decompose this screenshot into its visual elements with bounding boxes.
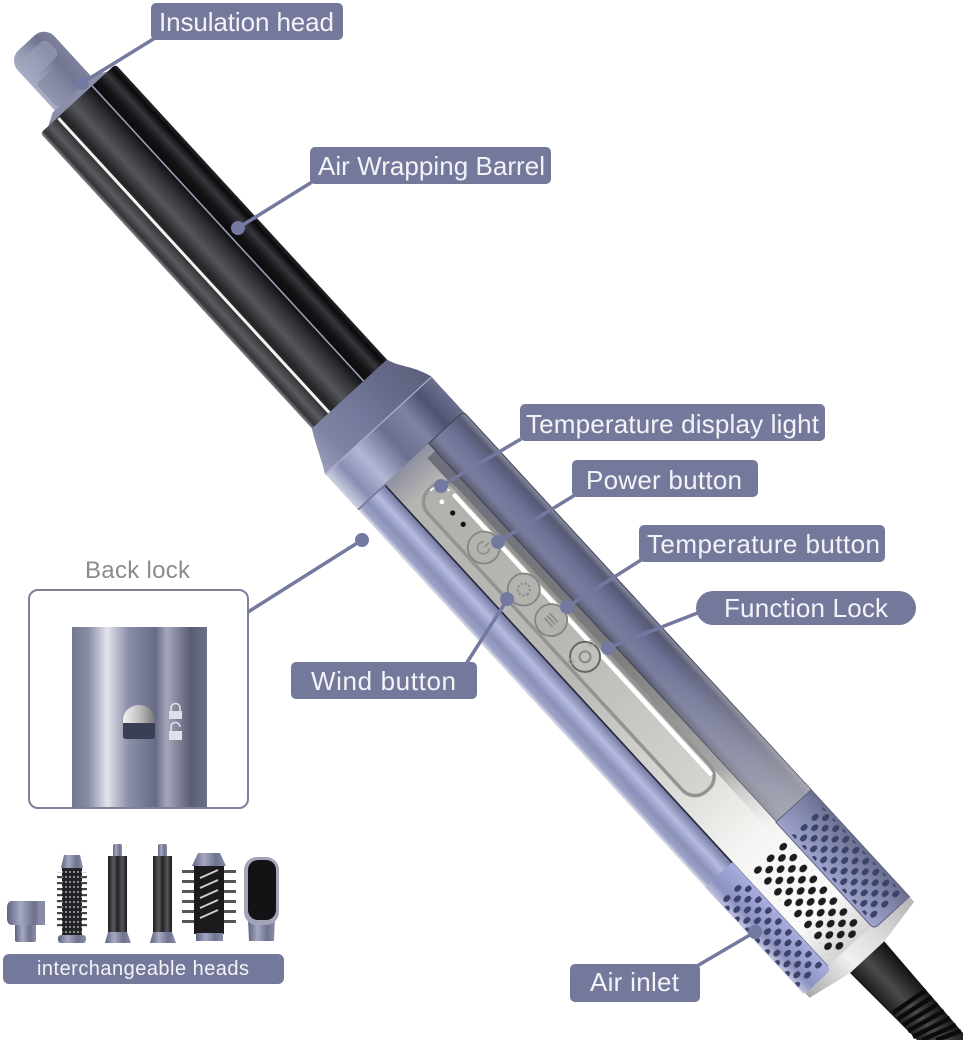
lower body panel [358, 485, 830, 993]
collar [296, 345, 434, 477]
temperature indicator dots [429, 481, 474, 528]
panel: back lock inset [29, 590, 248, 808]
end rim [802, 894, 920, 1004]
callout leader lines [82, 38, 755, 966]
silver control panel [384, 443, 886, 981]
head: large brush [182, 853, 236, 941]
interchangeable heads set [7, 844, 279, 943]
label: Power button [572, 460, 758, 497]
head: concentrator [7, 901, 45, 942]
callout dots [75, 76, 762, 939]
label: Temperature display light: Temperature display light [526, 409, 820, 439]
function lock button [563, 635, 607, 679]
label: Function Lock [696, 591, 916, 625]
insulation head tip [0, 14, 115, 134]
label: Insulation head: Insulation head [159, 7, 334, 37]
wind button [501, 567, 546, 612]
power button [461, 525, 506, 570]
cylinder [72, 627, 207, 807]
head: barrel two [150, 844, 176, 943]
head: paddle brush [244, 857, 279, 941]
label: Wind button [291, 662, 477, 699]
vented end: lower [705, 862, 831, 995]
upper body panel [429, 411, 811, 822]
power cable [850, 941, 963, 1040]
label: Function Lock: Function Lock [724, 593, 889, 623]
silver end vents [752, 841, 864, 957]
label: Wind button: Wind button [311, 666, 456, 696]
label: interchangeable heads [3, 954, 284, 984]
air wrapping barrel [40, 64, 390, 431]
label: Air inlet: Air inlet [590, 967, 680, 997]
label: Temperature button: Temperature button [647, 529, 880, 559]
icon: unlocked [169, 722, 182, 740]
head: round brush [57, 855, 87, 943]
body [325, 376, 920, 1006]
head: barrel one [105, 844, 131, 943]
label: Air Wrapping Barrel: Air Wrapping Barrel [318, 151, 545, 181]
temperature button [529, 597, 574, 643]
label: Air inlet [570, 964, 700, 1002]
label: Power button: Power button [586, 465, 742, 495]
icon: locked [169, 704, 182, 719]
vented end: upper [776, 790, 909, 929]
back lock caption: Back lock [85, 557, 191, 584]
label: interchangeable heads: interchangeable heads [37, 958, 249, 980]
lock slider [123, 705, 155, 739]
